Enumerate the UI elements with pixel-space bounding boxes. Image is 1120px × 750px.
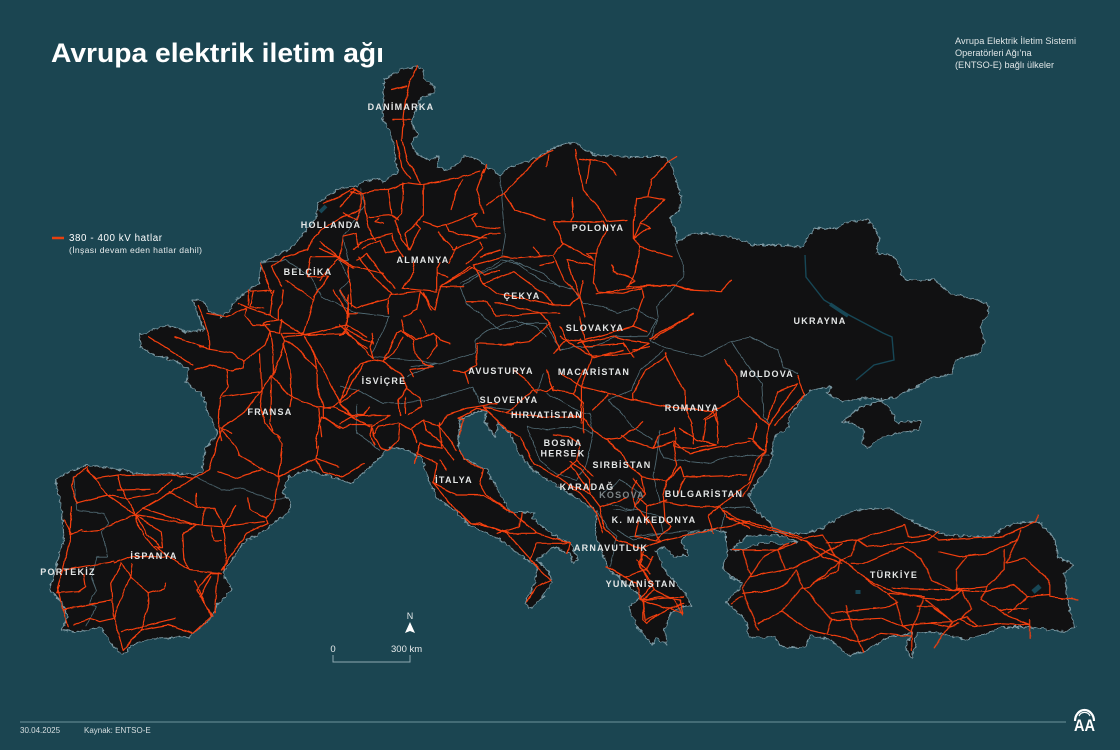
label: Ukraine: UKRAYNA [794,316,846,326]
land mass: continental Europe and Türkiye [50,66,1076,658]
380-400 kV transmission lines [57,66,1078,652]
label: Poland: POLONYA [572,223,624,233]
footer rule [20,721,1066,723]
label: Hungary: MACARİSTAN [558,367,630,377]
note: ENTSO-E member countries [955,36,1076,70]
date: 30.04.2025 [20,726,61,735]
label: Bulgaria: BULGARİSTAN [665,489,743,499]
scale bar [330,644,422,662]
label: Montenegro: KARADAĞ [560,481,614,492]
country borders: centre [460,243,683,350]
label: Moldova: MOLDOVA [740,369,794,379]
map: European transmission network [40,66,1078,658]
transmission lines: France [195,290,370,440]
label: France: FRANSA [248,407,292,417]
label: Italy: İTALYA [435,475,473,485]
land masses and sea inlets [50,66,1076,658]
label: Netherlands: HOLLANDA [301,220,361,230]
country borders: east [608,337,797,463]
transmission lines: Germany and Netherlands [320,170,500,317]
transmission lines: Poland, Czechia [440,150,693,358]
country borders: west [261,177,560,377]
country borders [73,177,797,627]
legend: 380-400 kV lines: 380 - 400 kV hatlar [69,233,163,244]
transmission lines: Bulgaria coast, Greece, Türkiye [610,442,1078,652]
logo: Anadolu Agency [1074,710,1095,735]
label: Türkiye: TÜRKİYE [870,570,918,580]
label: Slovakia: SLOVAKYA [566,323,624,333]
note: ENTSO-E member countries: Avrupa Elektrik İletim Sistemi [955,36,1076,46]
note: ENTSO-E member countries: (ENTSO-E) bağlı ülkeler [955,60,1054,70]
label: Kosovo: KOSOVA [599,490,645,500]
logo: Anadolu Agency: AA [1074,716,1095,735]
transmission lines: Italy and West Balkans [417,370,683,623]
lakes and rivers [320,206,1040,594]
country borders: Iberia [73,475,286,627]
country borders: Thrace [721,507,758,533]
transmission lines: Iberia and South France [57,417,371,650]
label: Denmark: DANİMARKA [368,102,434,112]
north arrow [405,611,415,633]
legend: 380-400 kV lines [52,233,202,255]
transmission lines: Serbia, Bulgaria, Macedonia [570,412,750,560]
land mass: Crimea [842,400,921,448]
label: Czechia: ÇEKYA [504,291,540,301]
north arrow: N [407,611,413,621]
label: Romania: ROMANYA [665,403,719,413]
label: Serbia: SIRBİSTAN [592,460,652,470]
label: North Macedonia: K. MAKEDONYA [612,515,696,525]
scale bar: 300 km [391,644,422,655]
label: Portugal: PORTEKİZ [40,567,96,577]
label: Bosnia and Herzegovina: HERSEK [540,448,586,458]
label: Germany: ALMANYA [397,255,449,265]
transmission lines: Denmark, Belgium, Brittany [148,66,420,365]
transmission lines: Romania, Moldova, Ukraine [560,280,805,480]
label: Croatia: HIRVATİSTAN [511,410,583,420]
label: Belgium: BELÇİKA [284,267,332,277]
scale bar: 0 [330,644,336,655]
label: Switzerland: İSVİÇRE [362,376,406,386]
label: Slovenia: SLOVENYA [480,395,538,405]
transmission lines: Alps and North Italy [340,320,513,463]
title: Avrupa elektrik iletim ağı [51,38,384,68]
legend: 380-400 kV lines: (İnşası devam eden hatlar dahil) [69,245,202,255]
label: Bosnia and Herzegovina: BOSNA [544,438,582,448]
country borders: south-east [340,373,700,567]
source: Kaynak: ENTSO-E [84,726,151,735]
note: ENTSO-E member countries: Operatörleri Ağı’na [955,48,1032,58]
sea of Marmara [731,535,796,550]
label: Spain: İSPANYA [130,551,178,561]
label: Albania: ARNAVUTLUK [574,543,648,553]
label: Greece: YUNANİSTAN [606,579,676,589]
label: Austria: AVUSTURYA [468,366,534,376]
country labels [40,102,918,589]
